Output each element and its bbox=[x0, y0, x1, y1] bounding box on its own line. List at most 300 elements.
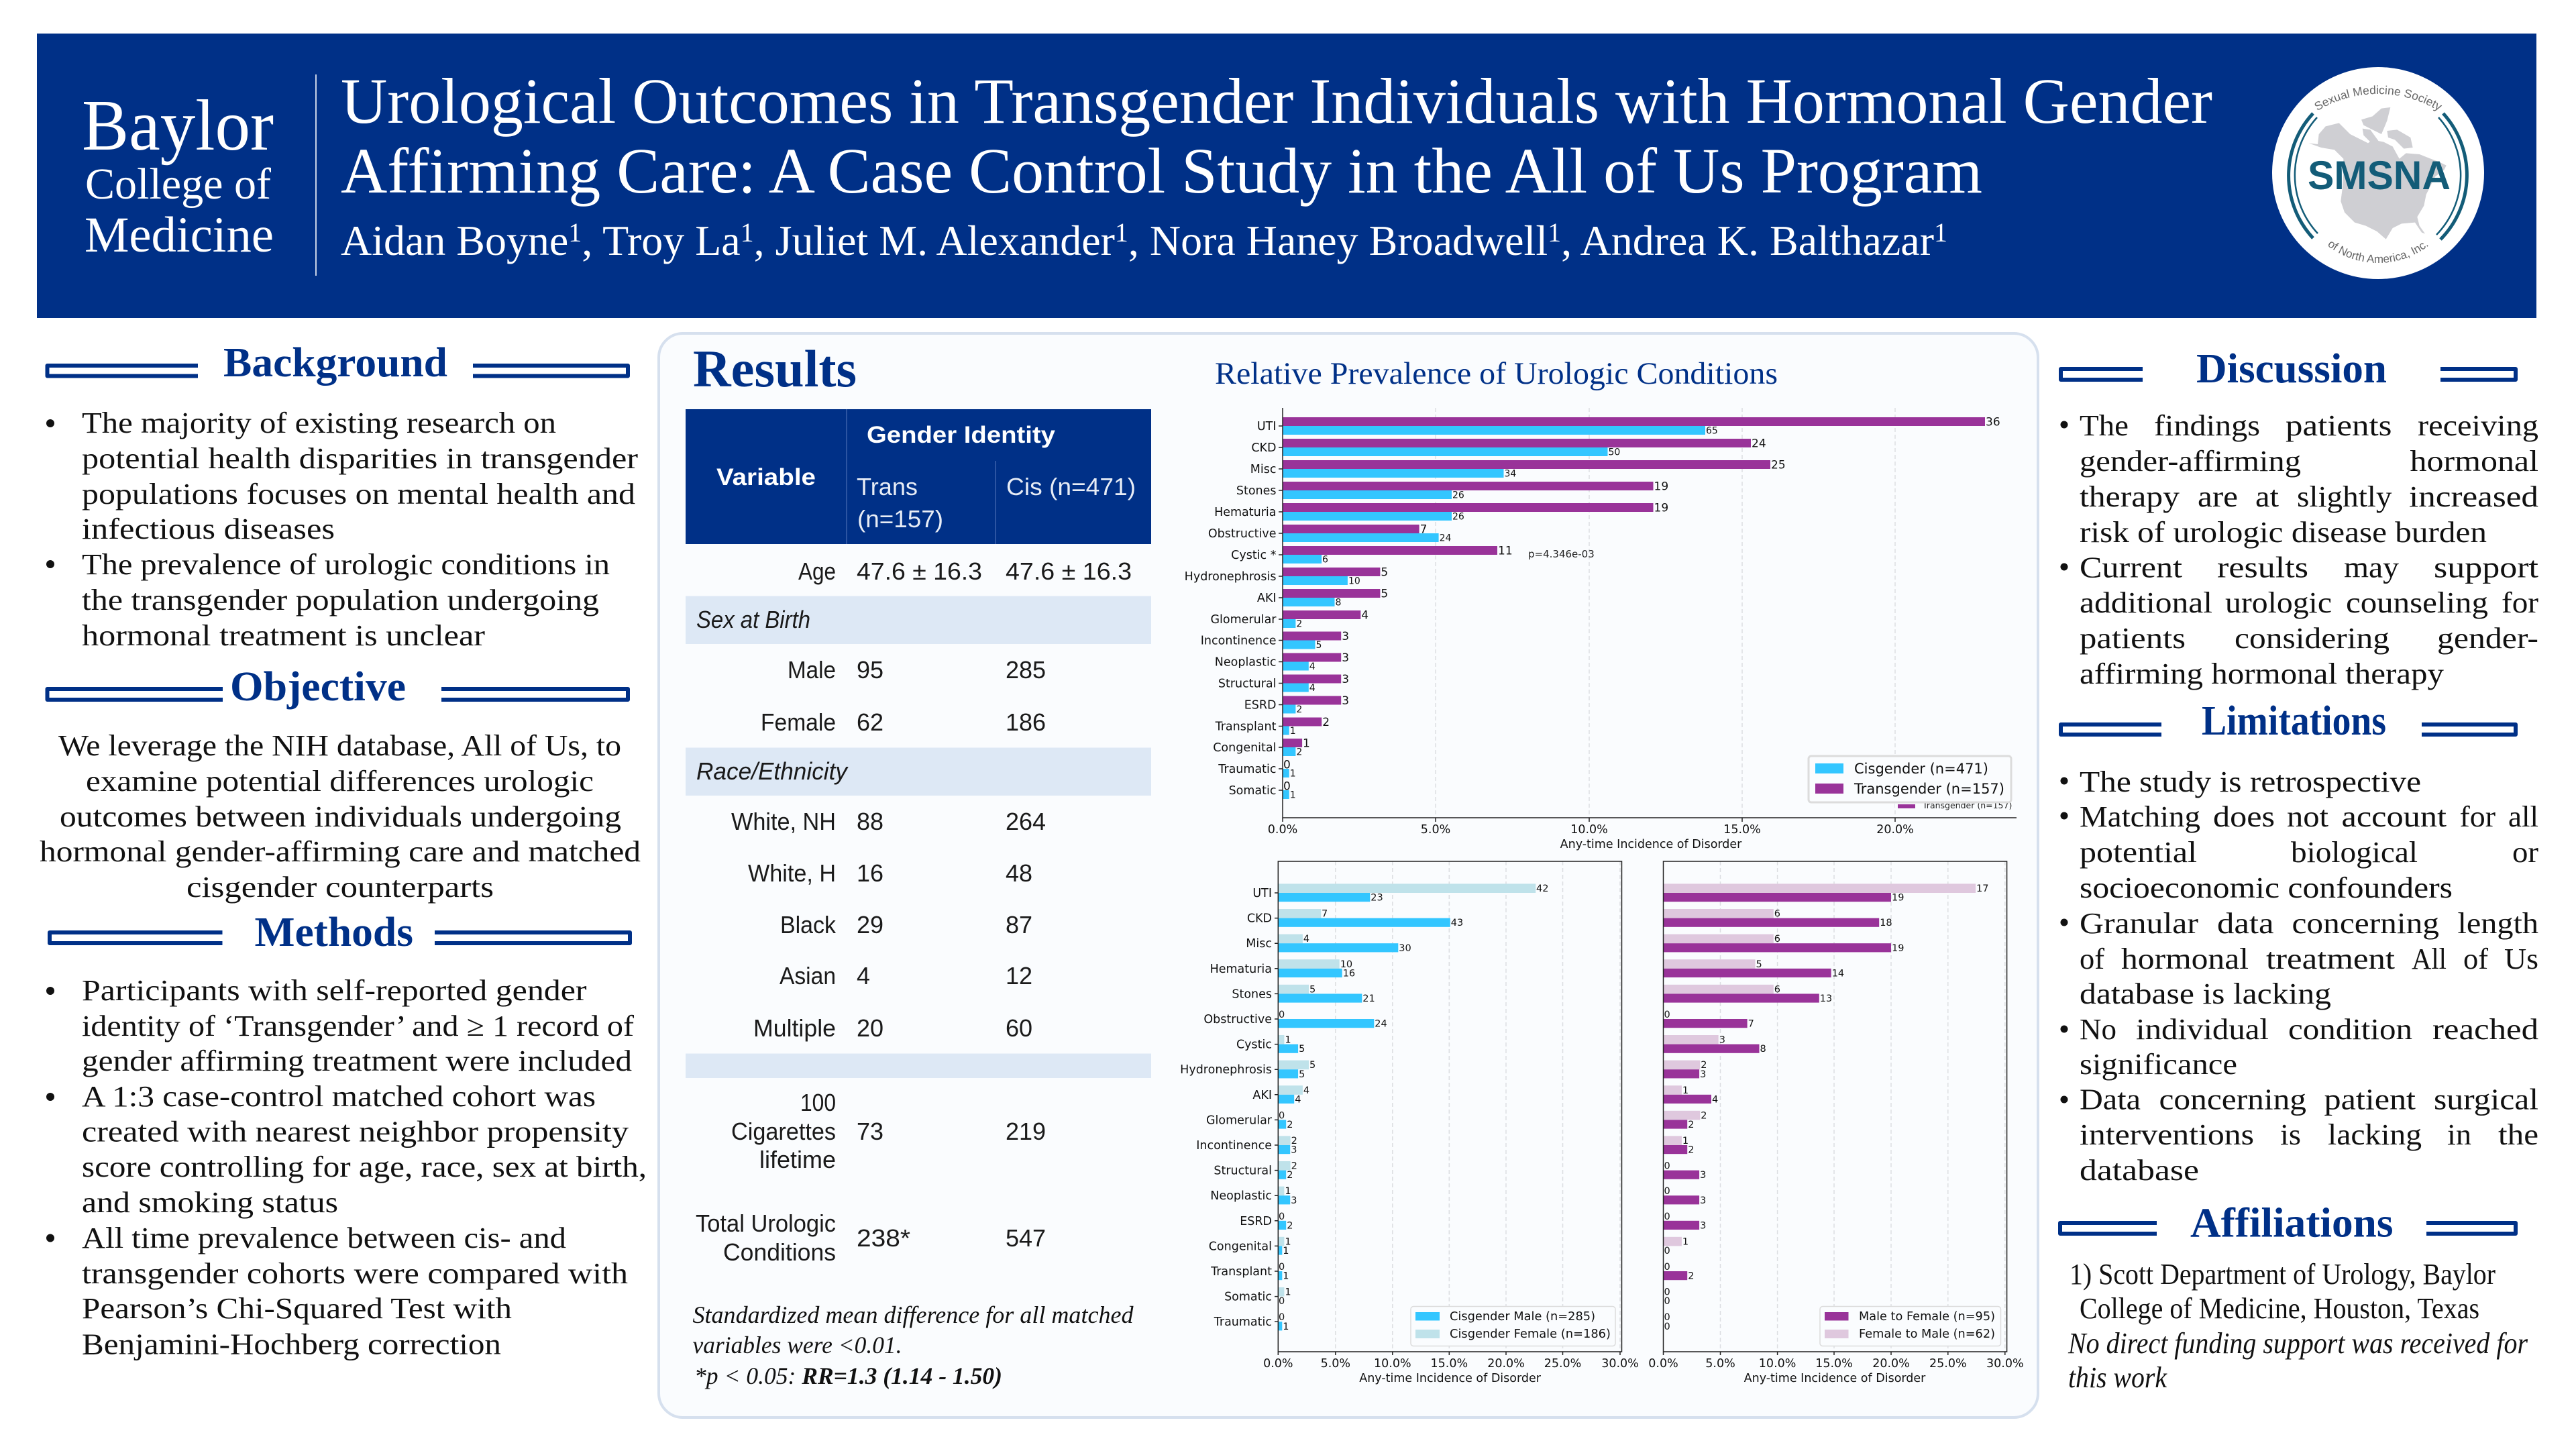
text block: discussion bullets: considering bbox=[2235, 622, 2390, 655]
x axis tick labels: 30.0% bbox=[1986, 1357, 2024, 1371]
heading: affiliations: Affiliations bbox=[2190, 1201, 2394, 1246]
table: matched cohort demographics: lifetime bbox=[759, 1146, 836, 1173]
x axis tick labels: 15.0% bbox=[1431, 1357, 1468, 1371]
value labels: 19 bbox=[1892, 893, 1904, 904]
text block: methods bullets: Benjamini-Hochberg correction bbox=[82, 1328, 501, 1361]
text block: discussion bullets: counseling bbox=[2346, 586, 2488, 619]
text block: limitations bullets: does bbox=[2213, 800, 2275, 833]
value labels: 3 bbox=[1291, 1195, 1297, 1206]
heading: objective bbox=[47, 664, 628, 710]
category labels: CKD bbox=[1247, 912, 1272, 926]
text block: limitations bullets: account bbox=[2341, 800, 2447, 833]
value labels: 3 bbox=[1719, 1035, 1725, 1046]
text block: limitations bullets: patient bbox=[2324, 1083, 2416, 1116]
table: matched cohort demographics: Multiple bbox=[753, 1014, 836, 1042]
x axis tick labels bbox=[1648, 1357, 2024, 1371]
value labels: 0 bbox=[1664, 1212, 1670, 1222]
text block: methods bullets: and smoking status bbox=[82, 1186, 338, 1219]
text block: discussion bullets: patients bbox=[2286, 409, 2392, 442]
text block: methods bullets: created with nearest neighbor propensity bbox=[82, 1116, 629, 1148]
table header: (n=157) bbox=[857, 505, 943, 533]
text block: methods bullets: All time prevalence between cis- and bbox=[82, 1222, 566, 1254]
value labels: 4 bbox=[1712, 1094, 1718, 1105]
transgender value labels: 36 bbox=[1986, 416, 2000, 429]
cisgender value labels: 6 bbox=[1322, 554, 1328, 565]
value labels: 2 bbox=[1688, 1271, 1694, 1282]
transgender value labels: 2 bbox=[1322, 716, 1330, 729]
x axis tick labels: 25.0% bbox=[1929, 1357, 1967, 1371]
category labels: AKI bbox=[1252, 1089, 1272, 1102]
text block: limitations bullets: length bbox=[2458, 907, 2538, 940]
table: matched cohort demographics: 186 bbox=[1006, 708, 1046, 736]
text block: discussion bullets: increased bbox=[2409, 480, 2538, 513]
text block: limitations bullets: database is lacking bbox=[2080, 977, 2331, 1010]
poster title: Urological Outcomes in Transgender Individuals with Hormonal Gender bbox=[341, 65, 2212, 137]
legend: Female to Male (n=62) bbox=[1859, 1328, 1995, 1341]
x axis tick labels: 5.0% bbox=[1705, 1357, 1735, 1371]
heading: methods: Methods bbox=[255, 910, 413, 955]
value labels: 2 bbox=[1291, 1161, 1297, 1172]
bar chart: overall prevalence bbox=[1185, 408, 2017, 851]
category labels: Hematuria bbox=[1210, 963, 1272, 976]
table header: Cis (n=471) bbox=[1006, 473, 1136, 500]
value labels: 0 bbox=[1279, 1010, 1285, 1020]
category labels: Transplant bbox=[1210, 1265, 1272, 1279]
table: matched cohort demographics bbox=[686, 409, 1151, 1266]
cisgender value labels: 2 bbox=[1296, 704, 1302, 715]
axes frame bbox=[1278, 861, 1622, 1352]
cisgender value labels: 10 bbox=[1348, 576, 1360, 586]
value labels: 3 bbox=[1700, 1195, 1706, 1206]
category labels: Cystic bbox=[1236, 1038, 1272, 1052]
heading: objective: Objective bbox=[230, 664, 406, 710]
table: matched cohort demographics: 29 bbox=[857, 911, 883, 938]
table: matched cohort demographics: 62 bbox=[857, 708, 883, 736]
value labels: 7 bbox=[1748, 1019, 1754, 1030]
category labels: Glomerular bbox=[1206, 1114, 1273, 1127]
category labels: Obstructive bbox=[1203, 1013, 1272, 1026]
heading: results: Results bbox=[693, 339, 857, 398]
x axis tick labels bbox=[1263, 1357, 1639, 1371]
text block: discussion bullets: The bbox=[2080, 409, 2129, 442]
text block: affiliations and funding: 1) Scott Department of Urology, Baylor bbox=[2070, 1258, 2496, 1291]
category labels: Traumatic bbox=[1218, 763, 1276, 776]
category labels: ESRD bbox=[1240, 1215, 1272, 1228]
cisgender female bars bbox=[1278, 883, 1536, 1297]
value labels: 3 bbox=[1700, 1220, 1706, 1231]
transgender value labels: 5 bbox=[1381, 588, 1388, 601]
transgender value labels: 25 bbox=[1771, 459, 1786, 472]
text block: objective: cisgender counterparts bbox=[186, 871, 494, 904]
text block: background bullets: infectious diseases bbox=[82, 513, 335, 545]
category labels bbox=[1180, 887, 1273, 1329]
text block: discussion bullets: findings bbox=[2154, 409, 2260, 442]
heading: background: Background bbox=[223, 340, 447, 386]
text block: limitations bullets: All bbox=[2412, 943, 2447, 975]
category labels: Hydronephrosis bbox=[1185, 570, 1276, 584]
table: matched cohort demographics: 20 bbox=[857, 1014, 883, 1042]
value labels: 0 bbox=[1664, 1010, 1670, 1020]
value labels: 0 bbox=[1664, 1312, 1670, 1323]
text block: limitations bullets: Granular bbox=[2080, 907, 2198, 940]
category labels: Misc bbox=[1246, 937, 1272, 951]
cisgender value labels: 1 bbox=[1290, 769, 1296, 780]
transgender value labels: 7 bbox=[1420, 523, 1427, 537]
text block: limitations bullets: concerning bbox=[2159, 1083, 2306, 1116]
cisgender value labels: 4 bbox=[1309, 683, 1316, 694]
value labels: 7 bbox=[1322, 909, 1328, 920]
value labels: 2 bbox=[1701, 1060, 1707, 1071]
x axis tick labels: 20.0% bbox=[1872, 1357, 1910, 1371]
text block: limitations bullets: hormonal bbox=[2121, 943, 2249, 975]
x axis tick labels: 5.0% bbox=[1321, 1357, 1350, 1371]
x axis tick labels: 10.0% bbox=[1570, 823, 1608, 837]
axes bbox=[1283, 408, 2017, 818]
transgender value labels: 3 bbox=[1342, 673, 1349, 686]
value labels: 0 bbox=[1279, 1262, 1285, 1273]
value labels: 5 bbox=[1309, 984, 1316, 995]
panel: objective bbox=[40, 664, 641, 904]
table: matched cohort demographics: 12 bbox=[1006, 962, 1032, 989]
value labels: 1 bbox=[1682, 1085, 1688, 1096]
value labels: 2 bbox=[1688, 1145, 1694, 1156]
panel: methods bbox=[46, 910, 647, 1361]
heading: affiliations bbox=[2060, 1201, 2516, 1246]
text block: limitations bullets: No bbox=[2080, 1013, 2116, 1046]
value labels: 8 bbox=[1760, 1044, 1766, 1055]
panel: results bbox=[659, 333, 2038, 1417]
table: matched cohort demographics: Race/Ethnicity bbox=[696, 757, 849, 785]
x axis tick labels: 15.0% bbox=[1815, 1357, 1853, 1371]
text block: discussion bullets: slightly bbox=[2297, 480, 2392, 513]
text block: discussion bullets: additional bbox=[2080, 586, 2212, 619]
category labels: Structural bbox=[1214, 1165, 1272, 1178]
value labels: 19 bbox=[1892, 943, 1904, 954]
value labels: 0 bbox=[1279, 1212, 1285, 1222]
value labels: 0 bbox=[1664, 1262, 1670, 1273]
authors: 1 bbox=[568, 217, 582, 248]
category labels: Somatic bbox=[1229, 784, 1276, 798]
category labels: Traumatic bbox=[1214, 1316, 1272, 1329]
authors: 1 bbox=[1548, 217, 1561, 248]
cisgender value labels: 2 bbox=[1296, 747, 1302, 758]
text block: discussion bullets: may bbox=[2344, 551, 2399, 584]
category labels: Obstructive bbox=[1208, 527, 1276, 541]
heading: limitations: Limitations bbox=[2202, 698, 2386, 744]
value labels bbox=[1279, 883, 1548, 1332]
text block: limitations bullets: surgical bbox=[2434, 1083, 2538, 1116]
x axis tick labels: 5.0% bbox=[1421, 823, 1450, 837]
transgender value labels: 0 bbox=[1283, 758, 1291, 771]
logo: SMSNA seal: Sexual Medicine Society bbox=[2314, 85, 2442, 111]
legend: Cisgender (n=471) bbox=[1854, 761, 1988, 777]
cisgender value labels: 26 bbox=[1452, 490, 1464, 500]
text block: limitations bullets: for bbox=[2459, 800, 2496, 833]
transgender value labels: 24 bbox=[1752, 437, 1766, 451]
authors: , Nora Haney Broadwell bbox=[1128, 217, 1548, 264]
text block: affiliations and funding: College of Medicine, Houston, Texas bbox=[2080, 1292, 2479, 1325]
table: matched cohort demographics: 547 bbox=[1006, 1224, 1046, 1252]
text block: discussion bullets: therapy bbox=[2080, 480, 2180, 513]
logo: Baylor College of Medicine bbox=[82, 86, 274, 263]
logo: Baylor College of Medicine: Medicine bbox=[85, 207, 274, 263]
authors: Aidan Boyne bbox=[341, 217, 569, 264]
table: matched cohort demographics: 47.6 ± 16.3 bbox=[1006, 557, 1132, 585]
value labels: 16 bbox=[1343, 968, 1355, 979]
value labels: 4 bbox=[1303, 1085, 1309, 1096]
text block: affiliations and funding: No direct funding support was received for bbox=[2068, 1327, 2528, 1360]
value labels bbox=[1664, 883, 1988, 1332]
legend bbox=[1411, 1307, 1615, 1346]
transgender value labels: 3 bbox=[1342, 694, 1349, 708]
table: matched cohort demographics: Black bbox=[780, 911, 837, 938]
table: matched cohort demographics: Conditions bbox=[723, 1238, 836, 1266]
female to male bars bbox=[1664, 883, 1976, 1246]
legend: Cisgender Female (n=186) bbox=[1450, 1328, 1611, 1341]
text block: limitations bullets: condition bbox=[2288, 1013, 2412, 1046]
text block: limitations bullets: potential bbox=[2080, 836, 2197, 869]
text block: limitations bullets: Us bbox=[2504, 943, 2538, 975]
table: matched cohort demographics: 88 bbox=[857, 808, 883, 835]
text block: limitations bullets: reached bbox=[2432, 1013, 2538, 1046]
panel: limitations bbox=[2061, 698, 2538, 1187]
text block: limitations bullets: database bbox=[2080, 1154, 2199, 1187]
value labels: 1 bbox=[1283, 1246, 1289, 1256]
authors: 1 bbox=[741, 217, 754, 248]
purple transgender bars bbox=[1283, 417, 1985, 747]
cisgender value labels: 34 bbox=[1504, 468, 1516, 479]
x axis tick labels: 20.0% bbox=[1487, 1357, 1525, 1371]
value labels: 5 bbox=[1756, 959, 1762, 970]
cisgender value labels: 50 bbox=[1609, 447, 1620, 458]
x axis tick labels: 0.0% bbox=[1648, 1357, 1678, 1371]
transgender value labels: 3 bbox=[1342, 630, 1349, 643]
table: matched cohort demographics: 264 bbox=[1006, 808, 1046, 835]
text block: limitations bullets: or bbox=[2512, 836, 2538, 869]
text block: discussion bullets: receiving bbox=[2418, 409, 2538, 442]
text block: limitations bullets: not bbox=[2287, 800, 2328, 833]
value labels: 3 bbox=[1291, 1145, 1297, 1156]
table: matched cohort demographics: Asian bbox=[780, 962, 836, 989]
x axis title: Any-time Incidence of Disorder bbox=[1359, 1372, 1542, 1385]
cisgender value labels: 24 bbox=[1440, 533, 1452, 543]
table footnote: variables were <0.01. bbox=[692, 1332, 902, 1358]
category labels: Neoplastic bbox=[1215, 656, 1276, 669]
value labels: 2 bbox=[1701, 1110, 1707, 1121]
text block: background bullets: populations focuses on mental health and bbox=[82, 478, 635, 511]
table: matched cohort demographics: 87 bbox=[1006, 911, 1032, 938]
category labels bbox=[1185, 420, 1277, 798]
legend underlay bbox=[1895, 798, 2016, 810]
text block: limitations bullets: significance bbox=[2080, 1048, 2237, 1081]
table footnote: *p < 0.05: RR=1.3 (1.14 - 1.50) bbox=[694, 1362, 1002, 1389]
x axis tick labels: 20.0% bbox=[1876, 823, 1914, 837]
category labels: Stones bbox=[1232, 987, 1272, 1001]
text block: limitations bullets: Matching bbox=[2080, 800, 2200, 833]
legend underlay: Transgender (n=157) bbox=[1922, 800, 2012, 810]
text block: methods bullets: score controlling for age, race, sex at birth, bbox=[82, 1150, 647, 1183]
authors: , Troy La bbox=[582, 217, 741, 264]
text block: methods bullets: Pearson’s Chi-Squared Test with bbox=[82, 1292, 512, 1325]
value labels: 10 bbox=[1340, 959, 1352, 970]
text block: background bullets: hormonal treatment is unclear bbox=[82, 619, 485, 652]
category labels: Somatic bbox=[1224, 1291, 1272, 1304]
table header: Trans bbox=[857, 473, 918, 500]
text block: background bullets: The prevalence of urologic conditions in bbox=[82, 548, 610, 581]
value labels: 1 bbox=[1285, 1186, 1291, 1197]
transgender value labels bbox=[1283, 416, 2000, 793]
text block: objective: outcomes between individuals undergoing bbox=[60, 800, 621, 833]
authors: , Andrea K. Balthazar bbox=[1561, 217, 1934, 264]
cyan cisgender bars bbox=[1283, 426, 1705, 799]
text block: discussion bullets: gender- bbox=[2437, 622, 2538, 655]
heading: discussion: Discussion bbox=[2196, 346, 2387, 392]
text block: methods bullets bbox=[46, 974, 647, 1361]
cisgender value labels bbox=[1290, 425, 1718, 801]
legend bbox=[1809, 756, 2011, 802]
value labels: 0 bbox=[1279, 1110, 1285, 1121]
value labels: 0 bbox=[1664, 1287, 1670, 1298]
heading: background bbox=[47, 340, 628, 386]
text block: limitations bullets: treatment bbox=[2266, 943, 2395, 975]
x axis tick labels: 30.0% bbox=[1601, 1357, 1639, 1371]
logo: SMSNA seal: SMSNA bbox=[2308, 153, 2451, 198]
table: matched cohort demographics: 219 bbox=[1006, 1118, 1046, 1145]
table: matched cohort demographics: Male bbox=[788, 656, 836, 684]
category labels: Hematuria bbox=[1214, 506, 1276, 519]
cisgender male bars bbox=[1278, 893, 1450, 1330]
text block: background bullets: The majority of existing research on bbox=[82, 407, 556, 439]
category labels: Congenital bbox=[1213, 741, 1276, 755]
value labels: 0 bbox=[1664, 1322, 1670, 1332]
legend bbox=[1820, 1307, 2000, 1346]
category labels: Misc bbox=[1250, 463, 1276, 476]
text block: methods bullets: transgender cohorts were compared with bbox=[82, 1257, 628, 1290]
category labels: Structural bbox=[1218, 678, 1276, 691]
text block: discussion bullets: support bbox=[2434, 551, 2538, 584]
poster title: Affirming Care: A Case Control Study in the All of Us Program bbox=[341, 135, 1982, 207]
value labels: 0 bbox=[1664, 1161, 1670, 1172]
logo: Baylor College of Medicine: College of bbox=[85, 160, 271, 209]
table: matched cohort demographics: 285 bbox=[1006, 656, 1046, 684]
x axis title: Any-time Incidence of Disorder bbox=[1744, 1372, 1926, 1385]
x axis tick labels: 15.0% bbox=[1723, 823, 1761, 837]
axes frame bbox=[1664, 861, 2007, 1352]
table: matched cohort demographics: 238* bbox=[857, 1224, 910, 1252]
text block: methods bullets: A 1:3 case-control matched cohort was bbox=[82, 1080, 596, 1113]
table: matched cohort demographics: 48 bbox=[1006, 859, 1032, 887]
text block: limitations bullets: concerning bbox=[2292, 907, 2439, 940]
value labels: 43 bbox=[1451, 918, 1463, 928]
category labels: Transplant bbox=[1215, 720, 1277, 734]
x axis tick labels: 10.0% bbox=[1374, 1357, 1411, 1371]
value labels: 14 bbox=[1832, 968, 1844, 979]
authors: 1 bbox=[1115, 217, 1128, 248]
category labels: Incontinence bbox=[1201, 635, 1276, 648]
category labels: Stones bbox=[1236, 484, 1276, 498]
category labels: Hydronephrosis bbox=[1180, 1063, 1272, 1077]
heading: methods bbox=[50, 910, 630, 955]
table: matched cohort demographics: Female bbox=[761, 708, 836, 736]
value labels: 2 bbox=[1287, 1170, 1293, 1181]
heading: limitations bbox=[2061, 698, 2516, 744]
table: matched cohort demographics: White, H bbox=[748, 859, 836, 887]
cisgender value labels: 8 bbox=[1335, 597, 1341, 608]
value labels: 0 bbox=[1664, 1296, 1670, 1307]
category labels: AKI bbox=[1257, 592, 1276, 605]
text block: discussion bullets: affirming hormonal therapy bbox=[2080, 657, 2444, 690]
authors: 1 bbox=[1934, 217, 1947, 248]
value labels: 6 bbox=[1774, 934, 1780, 945]
text block: methods bullets: gender affirming treatment were included bbox=[82, 1044, 632, 1077]
table: matched cohort demographics: White, NH bbox=[731, 808, 836, 835]
value labels: 3 bbox=[1700, 1069, 1706, 1080]
transgender value labels: 5 bbox=[1381, 566, 1388, 580]
value labels: 42 bbox=[1536, 883, 1548, 894]
text block: background bullets: potential health disparities in transgender bbox=[82, 442, 638, 475]
text block: limitations bullets: The study is retrospective bbox=[2080, 765, 2421, 798]
text block: objective: We leverage the NIH database, All of Us, to bbox=[58, 729, 621, 762]
value labels: 3 bbox=[1700, 1170, 1706, 1181]
text block: discussion bullets: hormonal bbox=[2410, 445, 2538, 478]
text block: objective bbox=[40, 729, 641, 904]
text block: discussion bullets: at bbox=[2255, 480, 2279, 513]
value labels: 4 bbox=[1303, 934, 1309, 945]
text block: limitations bullets: of bbox=[2080, 943, 2104, 975]
text block: discussion bullets: gender-affirming bbox=[2080, 445, 2301, 478]
text block: background bullets bbox=[46, 407, 638, 652]
table: matched cohort demographics: Total Urologic bbox=[696, 1210, 836, 1237]
text block: methods bullets: Participants with self-reported gender bbox=[82, 974, 587, 1007]
x axis tick labels: 10.0% bbox=[1759, 1357, 1796, 1371]
text block: discussion bullets bbox=[2061, 409, 2538, 690]
text block: background bullets: the transgender population undergoing bbox=[82, 584, 599, 616]
category labels: UTI bbox=[1257, 420, 1276, 433]
x axis tick labels: 0.0% bbox=[1263, 1357, 1293, 1371]
text block: discussion bullets: risk of urologic disease burden bbox=[2080, 516, 2487, 549]
text block: objective: examine potential differences urologic bbox=[86, 765, 594, 798]
panel: background bbox=[46, 340, 638, 652]
table header: Variable bbox=[716, 464, 816, 490]
value labels: 1 bbox=[1285, 1236, 1291, 1247]
table footnote: Standardized mean difference for all matched bbox=[692, 1301, 1134, 1328]
category labels: Glomerular bbox=[1210, 613, 1277, 627]
authors: , Juliet M. Alexander bbox=[754, 217, 1115, 264]
transgender value labels: 3 bbox=[1342, 651, 1349, 665]
text block: affiliations and funding: this work bbox=[2068, 1361, 2167, 1394]
category labels: Congenital bbox=[1209, 1240, 1272, 1253]
cisgender value labels: 26 bbox=[1452, 511, 1464, 522]
table: matched cohort demographics: Cigarettes bbox=[731, 1118, 836, 1145]
value labels: 17 bbox=[1976, 883, 1988, 894]
table: matched cohort demographics: Sex at Birth bbox=[696, 606, 810, 633]
value labels: 1 bbox=[1682, 1236, 1688, 1247]
bar chart: cisgender male vs female bbox=[1180, 861, 1639, 1385]
transgender value labels: 0 bbox=[1283, 780, 1291, 793]
male to female bars bbox=[1664, 893, 1891, 1280]
bar chart: male to female vs female to male bbox=[1648, 861, 2024, 1385]
logo: SMSNA seal bbox=[2272, 67, 2484, 279]
cisgender value labels: 1 bbox=[1290, 790, 1296, 801]
category labels: Cystic * bbox=[1231, 549, 1277, 562]
table: matched cohort demographics: Age bbox=[798, 557, 836, 585]
value labels: 21 bbox=[1362, 994, 1375, 1004]
text block: limitations bullets: interventions bbox=[2080, 1118, 2254, 1151]
cisgender value labels: 1 bbox=[1290, 726, 1296, 737]
x axis tick labels bbox=[1268, 823, 1914, 837]
text block: limitations bullets: the bbox=[2498, 1118, 2538, 1151]
table: matched cohort demographics: 95 bbox=[857, 656, 883, 684]
